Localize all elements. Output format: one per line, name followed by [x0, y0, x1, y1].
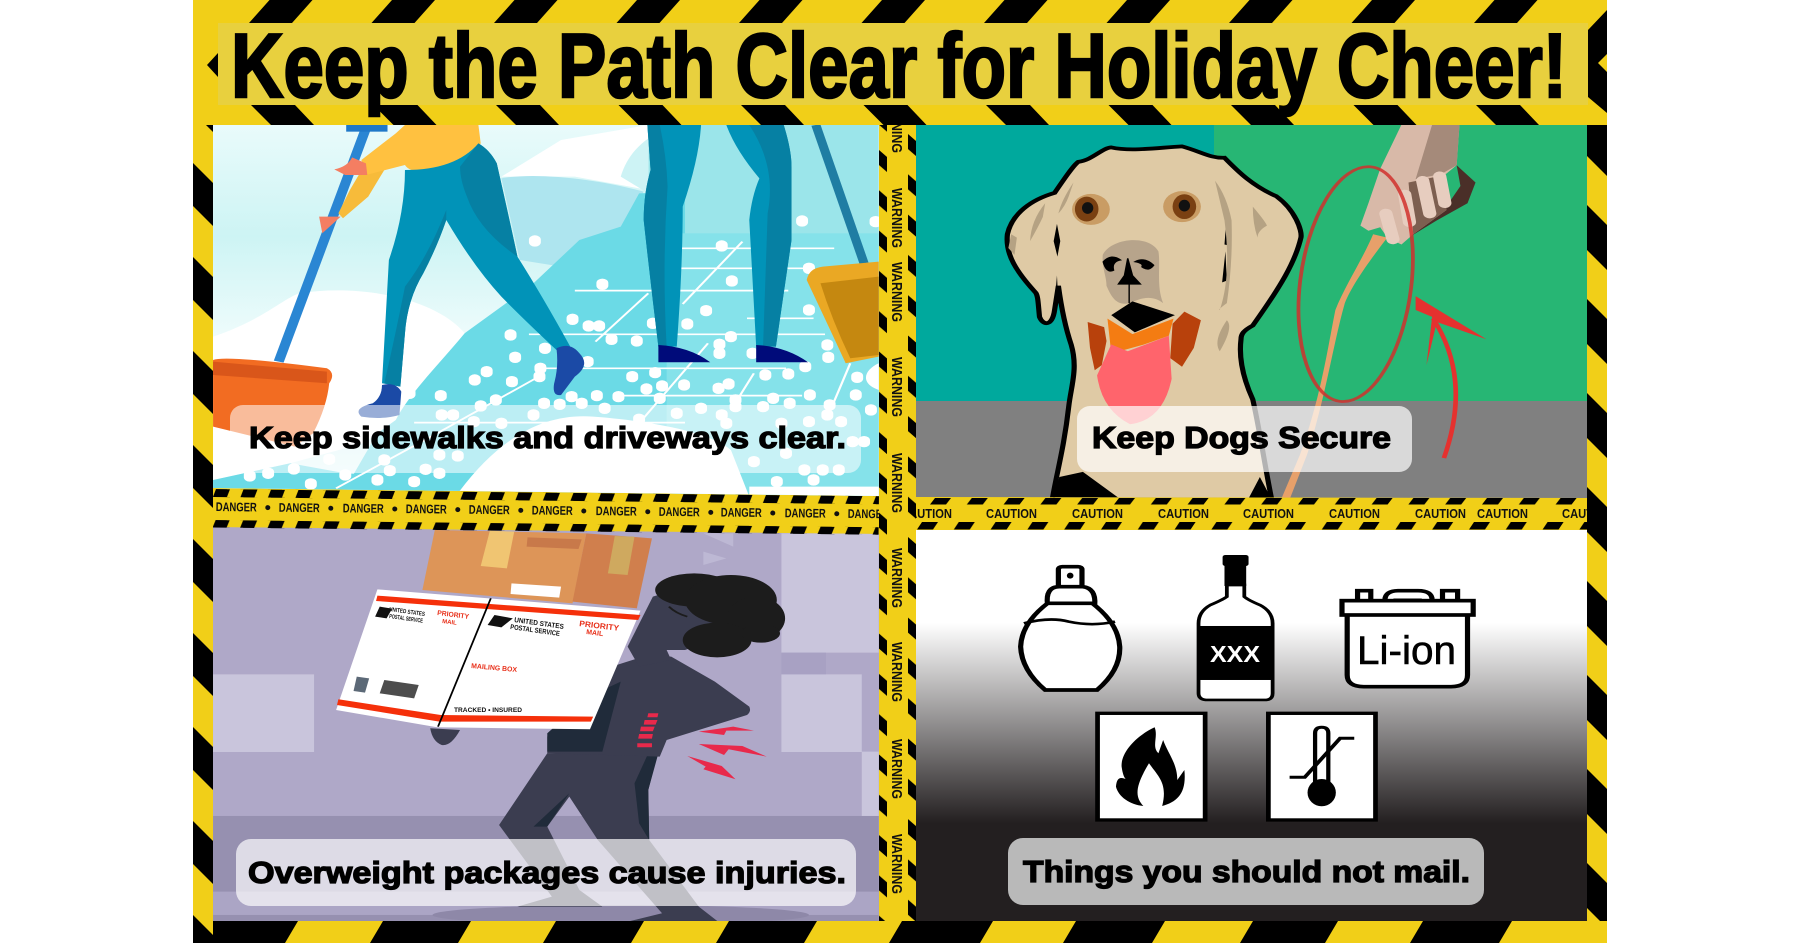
danger tape: DANGER: [532, 503, 573, 518]
caution tape: CAUTION: [1243, 507, 1294, 521]
warning tape: WARNING: [888, 262, 905, 322]
title banner: [193, 0, 1607, 132]
danger tape: DANGER: [848, 507, 889, 521]
left hazard tape border: [193, 125, 213, 943]
poster tape background: [193, 0, 1607, 943]
caption: mail: Things you should not mail.: [1023, 854, 1470, 889]
caution tape: CAUTION: [1477, 507, 1528, 521]
box text: POSTAL SERVICE: [510, 624, 560, 638]
danger tape: DANGER: [343, 501, 384, 516]
panel: secure dog: [916, 125, 1587, 499]
icon label: Li-ion: Li-ion: [1357, 629, 1456, 673]
caution tape: CAUTION: [1415, 507, 1466, 521]
danger tape: DANGER: [596, 504, 637, 519]
caption: dogs: Keep Dogs Secure: [1092, 420, 1391, 455]
icon: temperature: [1268, 713, 1375, 820]
right hazard tape border: [1587, 125, 1607, 943]
box text: TRACKED • INSURED: [454, 708, 523, 714]
caution tape: CAUTION: [1562, 507, 1613, 521]
warning tape: WARNING: [888, 188, 905, 248]
danger tape: [213, 489, 889, 535]
box text: POSTAL SERVICE: [389, 614, 423, 625]
panel: things not to mail: [916, 530, 1587, 921]
warning tape: [879, 93, 916, 921]
caution tape: CAUTION: [986, 507, 1037, 521]
danger tape: DANGER: [279, 501, 320, 515]
caption background: [1077, 406, 1412, 472]
caption: sidewalks: Keep sidewalks and driveways clear.: [249, 420, 846, 455]
icon: priority mail box: [336, 589, 640, 729]
icon: leash and hand: [1281, 125, 1476, 499]
box text: PRIORITY: [437, 610, 470, 621]
bottom hazard tape: [213, 921, 1607, 943]
caption background: [236, 839, 856, 906]
warning tape: WARNING: [888, 548, 905, 608]
warning tape: WARNING: [888, 642, 905, 702]
caution tape: [901, 498, 1613, 530]
box text: PRIORITY: [579, 619, 620, 633]
caution tape: CAUTION: [1072, 507, 1123, 521]
icon: brown box: [422, 530, 652, 608]
icon: battery: [1342, 591, 1473, 687]
icon: red circle and arrow: [1286, 163, 1486, 458]
figure: person straining: [430, 573, 785, 922]
danger tape: DANGER: [785, 506, 826, 521]
caption: packages: Overweight packages cause injuries.: [248, 855, 846, 890]
warning tape: WARNING: [888, 93, 905, 153]
caption background: [230, 405, 861, 473]
figure: left person shovelling: [213, 125, 584, 447]
panel: snow shovelling: [213, 125, 879, 497]
caution tape: CAUTION: [1329, 507, 1380, 521]
icon: flammable: [1098, 713, 1205, 820]
box text: MAIL: [586, 629, 604, 638]
danger tape: DANGER: [721, 505, 762, 520]
warning tape: WARNING: [888, 453, 905, 513]
danger tape: DANGER: [659, 505, 700, 519]
box text: MAIL: [442, 619, 457, 627]
warning tape: WARNING: [888, 739, 905, 799]
box text: UNITED STATES: [514, 617, 565, 631]
box text: MAILING BOX: [471, 663, 518, 674]
caution tape: CAUTION: [901, 507, 952, 521]
box text: UNITED STATES: [389, 607, 425, 618]
figure: right person shovelling: [644, 125, 879, 363]
caution tape: CAUTION: [1158, 507, 1209, 521]
panel: overweight package: [213, 525, 879, 925]
icon: perfume bottle: [1021, 567, 1120, 690]
danger tape: DANGER: [469, 503, 510, 517]
warning tape: WARNING: [888, 357, 905, 417]
icon: dog: [1007, 146, 1301, 499]
icon label: XXX: XXX: [1210, 641, 1261, 667]
warning tape: WARNING: [888, 834, 905, 894]
icon: liquor bottle: [1199, 555, 1273, 700]
danger tape: DANGER: [216, 500, 257, 514]
danger tape: DANGER: [406, 502, 447, 517]
caption background: [1008, 838, 1484, 905]
box text: [389, 607, 620, 714]
